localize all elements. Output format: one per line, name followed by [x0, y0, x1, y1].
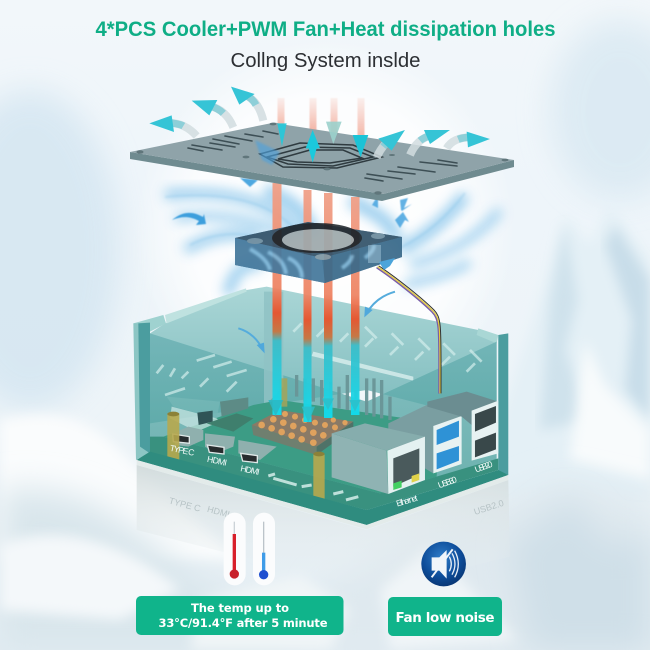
ethernet port: [332, 423, 425, 451]
cooling fan: [235, 222, 402, 283]
cooling arrow tips inside the case: [268, 398, 361, 423]
heat columns above the plate: [278, 98, 364, 144]
light shelf band: [312, 352, 413, 381]
icon: muted speaker: [421, 542, 466, 586]
callout: temperature: The temp up to: [191, 601, 289, 615]
heat columns below plate: [272, 183, 360, 422]
port labels: HDMI: [240, 463, 261, 477]
port labels: Ethernet: [395, 492, 419, 509]
reflection under the case: TYPE C: [168, 496, 202, 514]
curved exhaust arrows: [149, 87, 490, 157]
vent slots: [188, 131, 457, 181]
USB 3.0 ports: [388, 405, 462, 473]
thermometers: [224, 513, 275, 585]
USB-C port: [173, 427, 203, 447]
GPIO header pins: [297, 375, 390, 420]
inward airflow arrows: [238, 292, 395, 350]
small blue airflow arrows: [172, 178, 412, 228]
back walls: [150, 287, 497, 423]
port labels: TYPE C: [169, 443, 195, 458]
reflection under the case: [137, 465, 510, 590]
hot thermometer: [224, 513, 246, 585]
callout: temperature: 33°C/91.4°F after 5 minute: [158, 616, 328, 630]
fan cable: [377, 266, 441, 393]
callout: temperature: [136, 596, 344, 635]
circuit board: [137, 292, 508, 529]
cooling arrow heads over the plate: [277, 122, 368, 163]
vent chevrons on the back wall: [157, 323, 482, 395]
callout: fan low noise: [388, 597, 502, 636]
port labels: HDMI: [206, 454, 228, 468]
top vented plate: [130, 123, 514, 201]
port labels: [169, 443, 494, 509]
port labels: USB3.0: [437, 474, 458, 490]
base plate: [137, 452, 508, 525]
USB 2.0 ports: [427, 392, 498, 425]
back center post: [264, 292, 283, 407]
airflow swirls around fan: [165, 190, 500, 295]
heatsink: [252, 410, 353, 447]
HDMI ports: [205, 433, 235, 453]
reflection under the case: USB2.0: [472, 498, 505, 517]
reflection under the case: HDMI: [206, 504, 231, 520]
corner posts: [133, 323, 150, 460]
fan blades: [250, 245, 374, 278]
standoffs: [167, 413, 179, 463]
screw holes: [136, 123, 508, 195]
port labels: USB2.0: [473, 459, 494, 475]
cold thermometer: [253, 513, 275, 585]
front walls: [150, 333, 497, 510]
hexagonal fan grille: [260, 143, 382, 168]
title: 4*PCS Cooler+PWM Fan+Heat dissipation holes: [96, 18, 556, 41]
transparent case: [133, 287, 508, 510]
callout: fan low noise: Fan low noise: [396, 610, 494, 626]
subtitle: Collng System inslde: [230, 50, 420, 72]
board front slots: [268, 474, 358, 500]
